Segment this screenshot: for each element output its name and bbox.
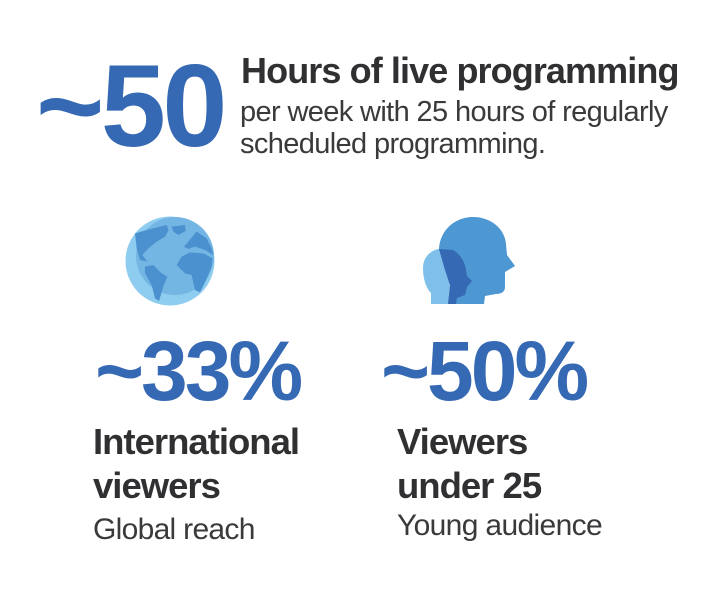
heading: hours of live programming: Hours of live programming bbox=[241, 50, 679, 91]
description: weekly programming: per week with 25 hours of regularly bbox=[240, 96, 668, 128]
heading: international viewers: viewers bbox=[93, 465, 220, 506]
description: weekly programming bbox=[240, 96, 668, 160]
icon: globe bbox=[126, 216, 214, 306]
heading: viewers under 25: under 25 bbox=[397, 465, 541, 506]
description: weekly programming: scheduled programming. bbox=[240, 128, 545, 160]
stat: ~33%: ~33% bbox=[95, 324, 300, 418]
caption: young audience: Young audience bbox=[397, 509, 602, 542]
big stat: ~50: ~50 bbox=[36, 40, 224, 171]
heading: viewers under 25 bbox=[397, 421, 542, 506]
heading: viewers under 25: Viewers bbox=[397, 421, 527, 462]
heading: international viewers: International bbox=[93, 421, 299, 462]
caption: global reach: Global reach bbox=[93, 513, 255, 546]
icon: two head profiles bbox=[423, 217, 515, 304]
stat: ~50%: ~50% bbox=[381, 324, 586, 418]
heading: international viewers bbox=[93, 421, 299, 506]
